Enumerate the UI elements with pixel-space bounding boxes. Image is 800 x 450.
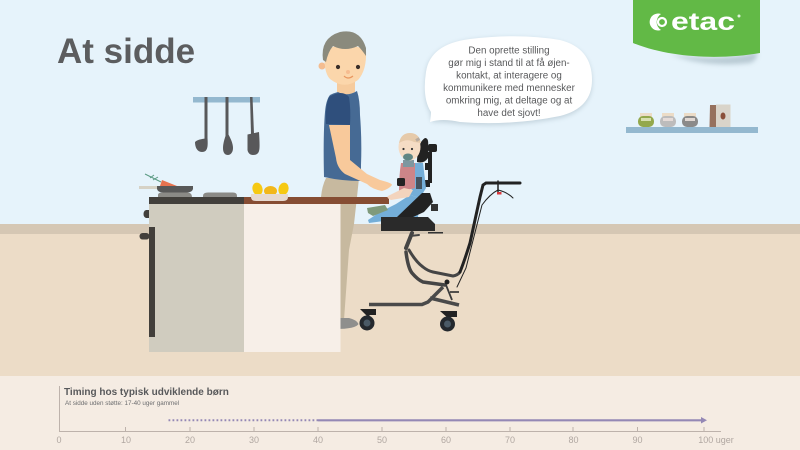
timeline subheading: At sidde uden støtte: 17-40 uger gammel bbox=[65, 400, 179, 407]
man: ear bbox=[318, 62, 326, 70]
man: hair bbox=[323, 31, 366, 62]
frame: harness block bbox=[397, 178, 405, 186]
axis labels: 50 bbox=[377, 435, 387, 445]
frame: black strut bbox=[397, 193, 433, 218]
speech text bbox=[443, 46, 576, 119]
standing frame back bbox=[410, 138, 437, 198]
speech bubble bbox=[425, 36, 592, 125]
axis labels: 20 bbox=[185, 435, 195, 445]
speech text: omkring mig, at deltage og at bbox=[446, 96, 572, 106]
logo: etac: etac bbox=[671, 8, 735, 36]
utensil rail with ladle, spatula and spoon bbox=[193, 97, 260, 155]
frame: headrest bbox=[417, 138, 437, 187]
wall background bbox=[0, 0, 800, 224]
man standing bbox=[318, 31, 392, 329]
axis labels: 100 uger bbox=[698, 435, 734, 445]
timeline heading: Timing hos typisk udviklende børn bbox=[64, 387, 229, 398]
axis labels: 30 bbox=[249, 435, 259, 445]
frame: push handle bbox=[457, 181, 520, 287]
icon: coffee bag bbox=[710, 104, 730, 127]
speech text: have det sjovt! bbox=[477, 108, 541, 119]
frame: side pad bbox=[416, 177, 422, 189]
frame: blue back bbox=[410, 163, 426, 198]
icon: spoon bbox=[223, 97, 233, 155]
pan with carrot on stove bbox=[139, 174, 193, 197]
child: arm bbox=[387, 188, 413, 200]
icon: green jar bbox=[638, 113, 654, 127]
second pot on stove bbox=[203, 192, 237, 197]
frame: column bbox=[406, 233, 460, 285]
man: shirt bbox=[324, 91, 361, 181]
axis labels: 80 bbox=[568, 435, 579, 445]
axis labels: 90 bbox=[632, 435, 643, 445]
timeline panel background bbox=[0, 376, 800, 450]
counter bbox=[140, 197, 389, 352]
man: neck bbox=[337, 80, 355, 95]
title: At sidde bbox=[57, 32, 195, 71]
frame: blue seat bbox=[368, 195, 420, 223]
man: shoe bbox=[335, 318, 358, 329]
icon: grey jar bbox=[682, 113, 698, 127]
wheel: rear bbox=[440, 311, 457, 332]
child: hair clip bbox=[415, 137, 420, 142]
counter: cabinet front bbox=[244, 204, 340, 352]
child: body bbox=[399, 163, 415, 192]
frame: seat base bbox=[381, 217, 435, 231]
standing frame seat bbox=[360, 177, 520, 332]
counter: stove front bbox=[149, 204, 244, 352]
axis labels: 0 bbox=[56, 435, 62, 445]
man: head bbox=[325, 45, 366, 85]
man: face bbox=[336, 65, 360, 78]
axis labels: 60 bbox=[441, 435, 451, 445]
man: leg bbox=[321, 178, 359, 320]
axis labels: 70 bbox=[505, 435, 515, 445]
axis labels: 10 bbox=[121, 435, 131, 445]
icon: light jar bbox=[660, 113, 676, 127]
timeline: solid arrow from 40 weeks bbox=[318, 417, 707, 424]
child: legs bbox=[367, 205, 388, 216]
speech text: Den oprette stilling bbox=[468, 46, 550, 56]
child front: legs and arm bbox=[367, 188, 413, 216]
counter: oven handle bbox=[149, 227, 155, 337]
man: arm bbox=[329, 125, 392, 191]
floor bbox=[0, 234, 800, 376]
child: head bbox=[398, 134, 420, 160]
timeline: dotted range 17-40 weeks bbox=[168, 419, 318, 421]
man: sleeve bbox=[326, 93, 350, 125]
icon: ladle bbox=[195, 97, 208, 152]
counter: knobs bbox=[140, 210, 150, 240]
logo: etac bbox=[633, 0, 760, 64]
shelf with jars and coffee bag bbox=[626, 104, 758, 133]
axis labels bbox=[56, 435, 734, 445]
baseboard bbox=[0, 224, 800, 234]
counter: dark stove top bbox=[149, 197, 244, 204]
counter: wooden top bbox=[244, 197, 389, 204]
wheel: front bbox=[360, 309, 376, 330]
frame: base rail bbox=[369, 287, 459, 305]
child: pacifier bbox=[403, 154, 413, 160]
bowl of lemons bbox=[251, 181, 290, 201]
speech text: kommunikere med mennesker bbox=[443, 83, 576, 94]
speech text: gør mig i stand til at få øjen- bbox=[448, 58, 570, 69]
icon: spatula bbox=[248, 97, 260, 155]
child bbox=[398, 133, 421, 192]
speech text: kontakt, at interagere og bbox=[456, 70, 562, 82]
frame: brake lever bbox=[497, 192, 502, 194]
axis labels: 40 bbox=[313, 435, 323, 445]
timeline axis bbox=[56, 386, 734, 445]
